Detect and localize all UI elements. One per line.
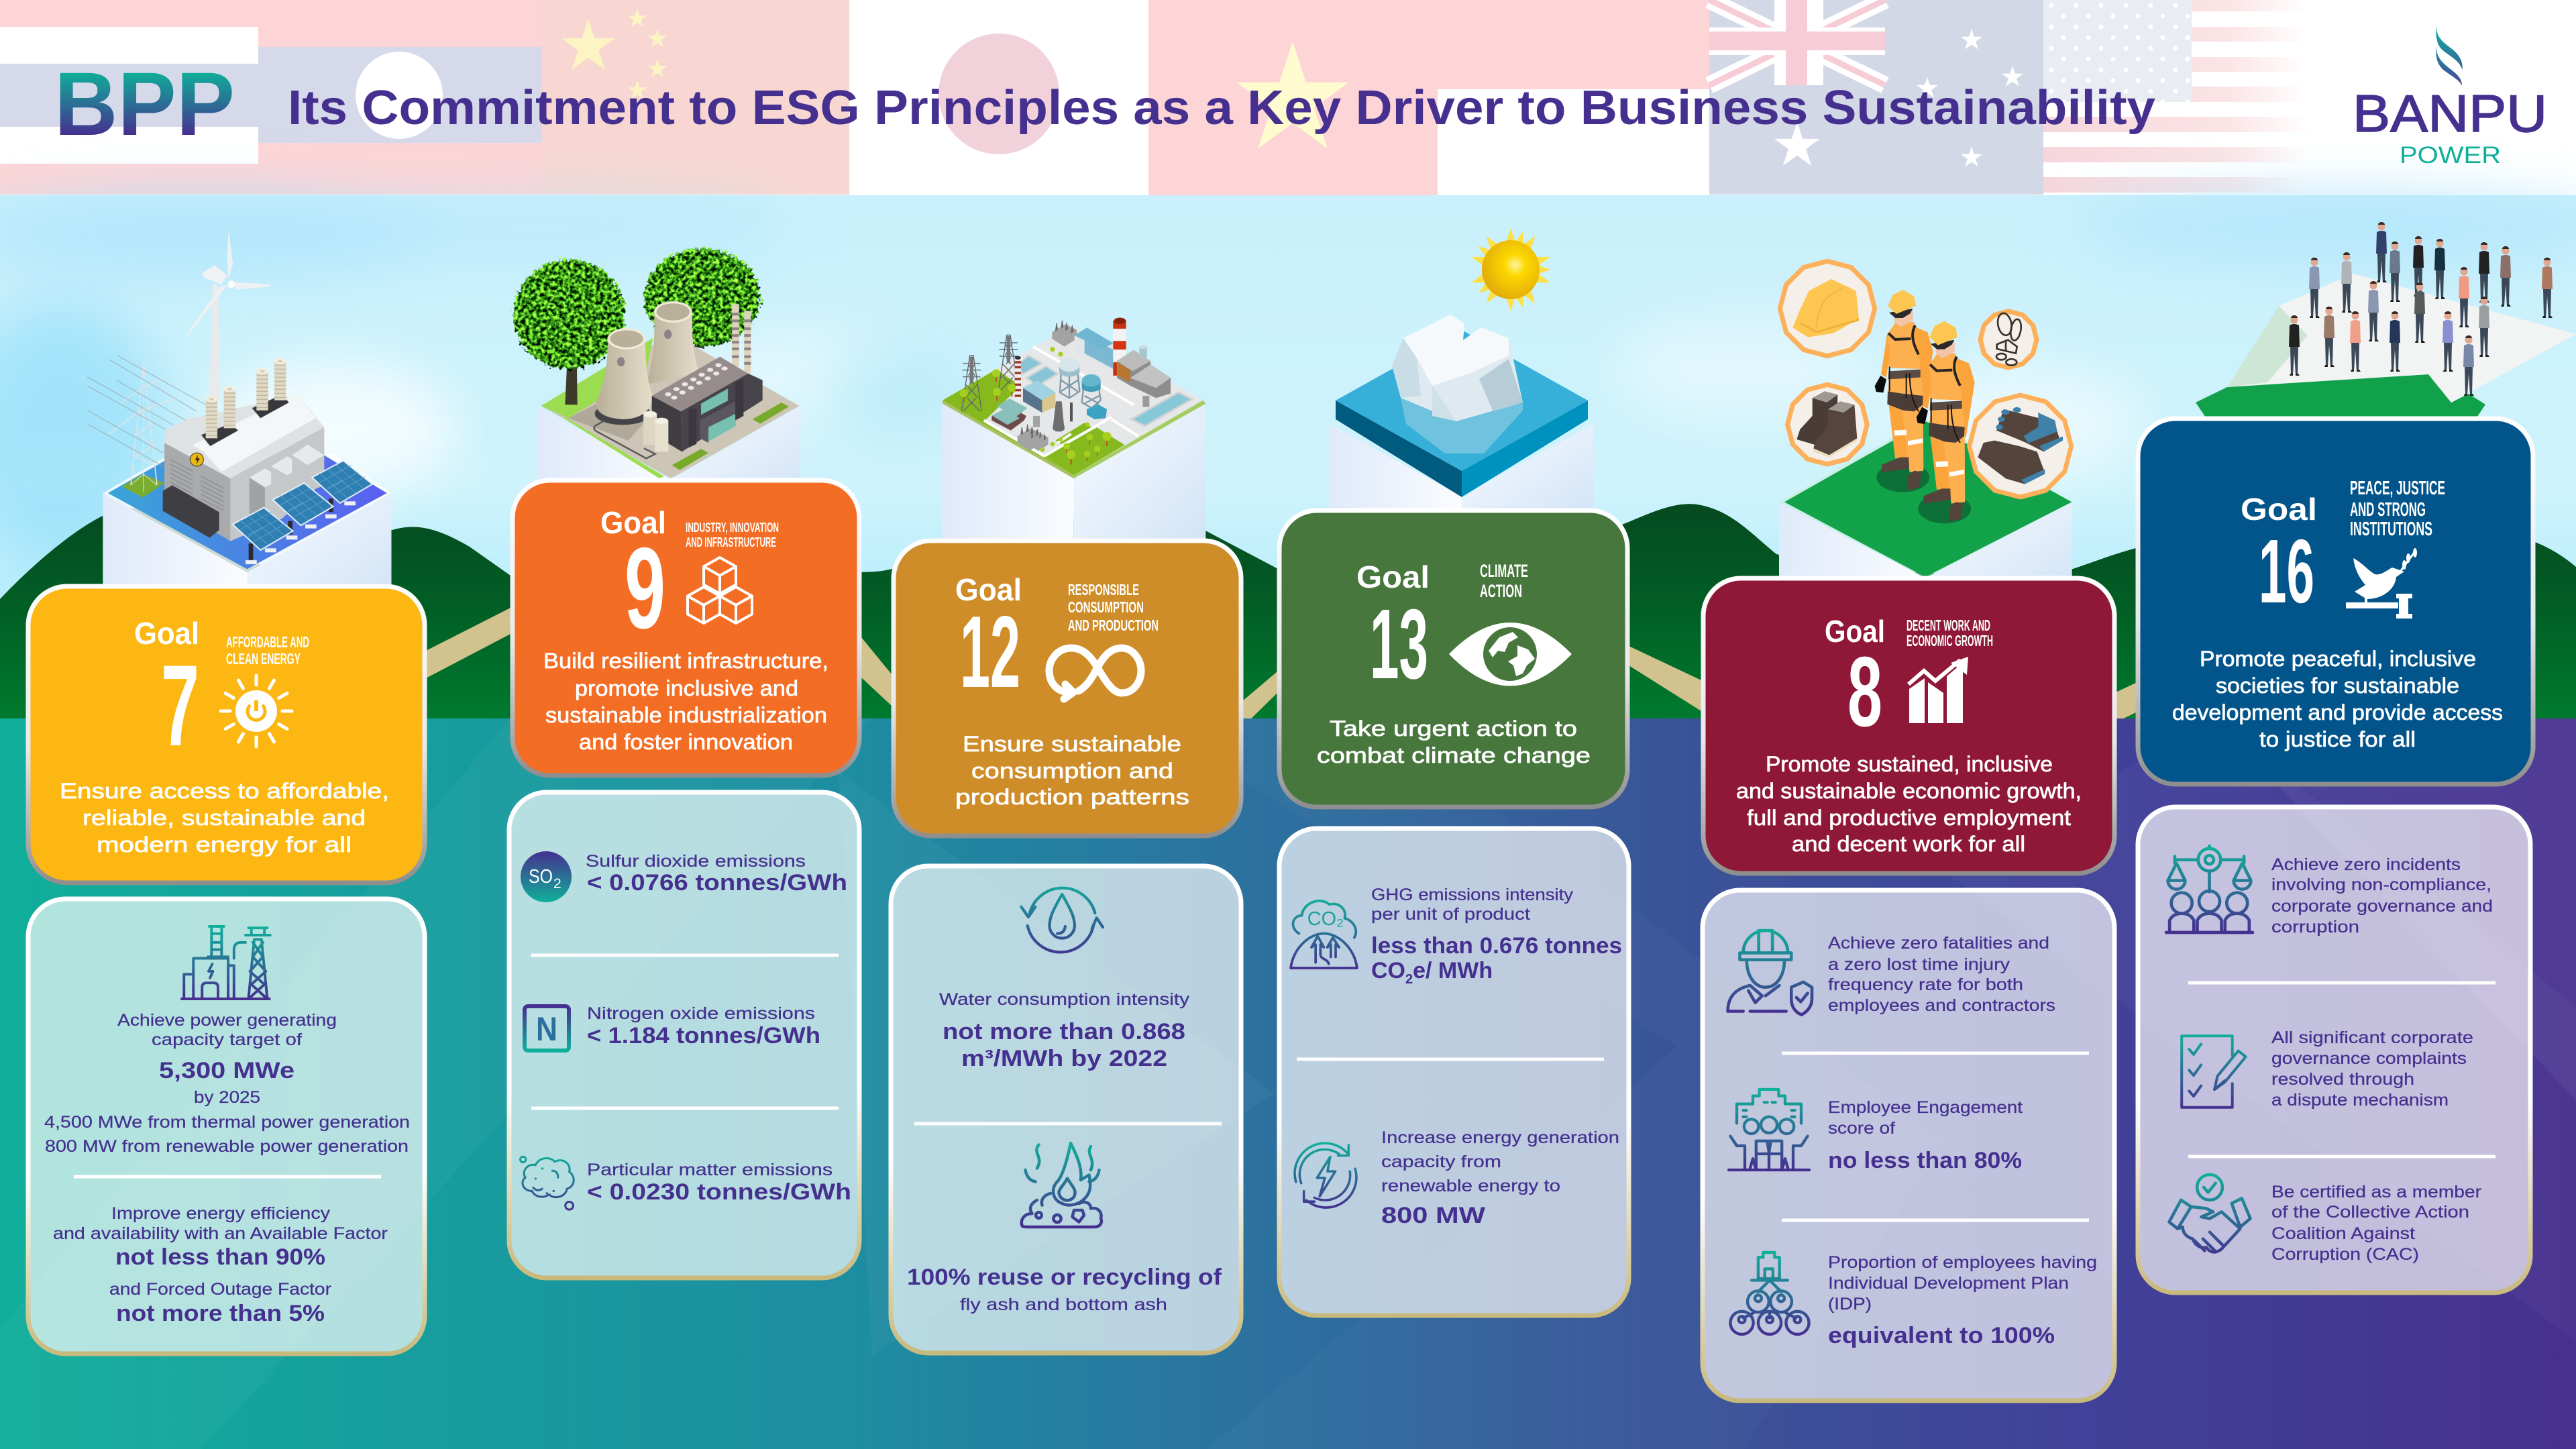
card: goal 9 <box>513 480 859 775</box>
goal label: Goal <box>1825 614 1885 649</box>
engagement target: no less than 80% <box>1828 1148 2022 1173</box>
icon: handshake <box>2169 1175 2250 1252</box>
capacity target text: capacity target of <box>152 1030 302 1049</box>
flag: Laos <box>258 0 542 195</box>
GHG target: GHG emissions intensity <box>1371 885 1574 904</box>
compliance target: corporate governance and <box>2271 897 2493 916</box>
flag: Vietnam <box>1148 0 1438 198</box>
sdg name <box>1480 561 1528 601</box>
icon: employee engagement <box>1729 1089 1809 1170</box>
logo: Banpu Power <box>2353 25 2547 168</box>
goal description: combat climate change <box>1317 743 1591 767</box>
renewable target: Increase energy generation <box>1381 1128 1619 1147</box>
complaints target: a dispute mechanism <box>2271 1091 2449 1110</box>
sdg name: INSTITUTIONS <box>2350 519 2432 540</box>
goal description <box>60 779 389 857</box>
safety target <box>1828 934 2055 1015</box>
flag: Japan <box>849 0 1148 195</box>
CAC target <box>2271 1183 2481 1264</box>
goal description: full and productive employment <box>1747 806 2071 830</box>
ash reuse target: 100% reuse or recycling of <box>907 1265 1222 1290</box>
efficiency target text: Improve energy efficiency <box>111 1204 331 1223</box>
goal description <box>2172 647 2503 751</box>
water target: not more than 0.868 <box>943 1019 1185 1044</box>
goal description: Promote peaceful, inclusive <box>2200 647 2476 671</box>
panel: goal 12 targets <box>891 866 1241 1353</box>
red and white chimney <box>1113 318 1126 376</box>
goal description: Take urgent action to <box>1330 716 1577 741</box>
particular matter target: < 0.0230 tonnes/GWh <box>587 1179 851 1205</box>
tiled office <box>1023 380 1055 413</box>
goal description: Promote sustained, inclusive <box>1766 752 2053 776</box>
flag: China <box>542 0 849 195</box>
renewable target: 800 MW <box>1381 1203 1486 1228</box>
renewable target <box>1381 1128 1619 1228</box>
capacity target text: 800 MW from renewable power generation <box>45 1137 409 1156</box>
nitrogen oxide target: Nitrogen oxide emissions <box>587 1004 815 1023</box>
goal number: 12 <box>960 595 1020 709</box>
goal number: 7 <box>161 641 199 770</box>
icon: power plant and pylon <box>182 926 270 999</box>
icon: nitrogen <box>525 1006 569 1051</box>
goal label: Goal <box>1356 559 1430 594</box>
ash reuse target: fly ash and bottom ash <box>960 1295 1167 1314</box>
efficiency target text: and availability with an Available Factor <box>53 1224 388 1243</box>
goal description: consumption and <box>971 759 1173 783</box>
IDP target: Individual Development Plan <box>1828 1274 2069 1293</box>
icon: nitrogen: N <box>536 1010 557 1048</box>
efficiency target text <box>53 1204 388 1326</box>
GHG target: e/ MWh <box>1413 958 1493 983</box>
goal label: Goal <box>2241 492 2317 527</box>
CAC target: of the Collective Action <box>2271 1203 2469 1222</box>
goal description <box>955 732 1189 809</box>
hills <box>0 504 2576 718</box>
icon: individual development plan <box>1730 1252 1809 1334</box>
workers <box>1875 290 1975 523</box>
compliance target <box>2271 855 2493 936</box>
compliance target: corruption <box>2271 918 2359 936</box>
sdg name <box>686 521 779 550</box>
water target: m³/MWh by 2022 <box>961 1046 1167 1071</box>
efficiency target text: not less than 90% <box>115 1244 325 1270</box>
IDP target: (IDP) <box>1828 1295 1872 1313</box>
flag: USA <box>2043 0 2308 195</box>
goal description <box>1736 752 2082 856</box>
goal description: promote inclusive and <box>575 676 798 700</box>
goal label: Goal <box>600 505 666 540</box>
IDP target: equivalent to 100% <box>1828 1323 2055 1348</box>
engagement target <box>1828 1098 2023 1173</box>
sulfur dioxide target: < 0.0766 tonnes/GWh <box>587 870 847 896</box>
goal description: and foster innovation <box>579 730 793 754</box>
scene: goal 9 cooling towers and trees <box>513 248 800 498</box>
scene: goal 8 workers with safety equipment <box>1779 261 2072 590</box>
water towers <box>1060 374 1101 408</box>
capacity target text <box>44 1011 410 1156</box>
safety target: Achieve zero fatalities and <box>1828 934 2049 953</box>
CAC target: Corruption (CAC) <box>2271 1245 2419 1264</box>
icon: SO2: SO <box>529 866 553 888</box>
icon: CO2 cloud <box>1291 901 1357 968</box>
solar panels <box>233 461 372 564</box>
trees <box>513 248 760 405</box>
goal description: reliable, sustainable and <box>83 806 366 830</box>
logo: BPP: BPP <box>54 54 235 154</box>
icon: infinity loop <box>1049 648 1141 699</box>
icon: renewable energy <box>1295 1143 1356 1208</box>
IDP target <box>1828 1253 2097 1348</box>
scene: goal 12 industrial complex <box>942 318 1205 543</box>
card: goal 13 <box>1279 511 1627 807</box>
pylons <box>961 335 1018 411</box>
icon: checklist and pencil <box>2182 1036 2246 1108</box>
icon: SO2 <box>521 851 572 902</box>
harness badge <box>1980 311 2037 368</box>
safety target: employees and contractors <box>1828 996 2055 1015</box>
wind turbine <box>188 229 270 400</box>
sdg name: AND INFRASTRUCTURE <box>686 535 776 550</box>
icon: cubes <box>688 557 752 623</box>
icon: eye with globe <box>1449 623 1572 686</box>
sun <box>1459 213 1567 320</box>
card: goal 8 <box>1703 578 2114 873</box>
efficiency target text: and Forced Outage Factor <box>109 1280 331 1299</box>
boots badge <box>1788 384 1867 464</box>
engagement target: score of <box>1828 1119 1895 1138</box>
goal description: Build resilient infrastructure, <box>543 649 828 673</box>
chimneys and plant building <box>643 304 763 451</box>
goal number: 9 <box>625 524 665 653</box>
sdg name <box>226 633 309 667</box>
CAC target: Be certified as a member <box>2271 1183 2481 1201</box>
particular matter target: Particular matter emissions <box>587 1161 833 1179</box>
sdg name: ACTION <box>1480 581 1522 601</box>
panel: goal 8 targets <box>1703 890 2114 1401</box>
sulfur dioxide target <box>586 852 847 896</box>
blue main building <box>1075 327 1114 369</box>
icon: dove and gavel <box>2346 548 2417 619</box>
logo: Banpu Power: POWER <box>2400 142 2501 168</box>
card: goal 7 <box>28 586 425 883</box>
icon: SO2: 2 <box>553 876 561 892</box>
flag: Thailand <box>0 0 258 195</box>
complaints target <box>2271 1028 2473 1110</box>
sdg name: CLEAN ENERGY <box>226 650 301 667</box>
GHG target: CO <box>1371 958 1405 983</box>
sdg name: AND PRODUCTION <box>1068 616 1159 634</box>
icon: growth chart <box>1909 657 1968 723</box>
goal description: societies for sustainable <box>2216 674 2459 698</box>
ash reuse target <box>907 1265 1222 1314</box>
goal label: Goal <box>955 572 1022 607</box>
sdg name <box>2350 478 2445 540</box>
renewable target: renewable energy to <box>1381 1177 1560 1195</box>
card: goal 16 <box>2138 419 2533 784</box>
pools <box>1018 356 1192 426</box>
icon: governance scales <box>2166 846 2253 932</box>
sdg name: CLIMATE <box>1480 561 1528 581</box>
complaints target: governance complaints <box>2271 1049 2467 1068</box>
sdg name: AFFORDABLE AND <box>226 633 309 651</box>
complaints target: resolved through <box>2271 1070 2414 1089</box>
sdg name: CONSUMPTION <box>1068 598 1144 616</box>
icon: safety worker <box>1728 930 1812 1015</box>
goal description <box>543 649 828 754</box>
sulfur dioxide target: Sulfur dioxide emissions <box>586 852 806 871</box>
goal description: and sustainable economic growth, <box>1736 779 2082 803</box>
goal description: production patterns <box>955 785 1189 809</box>
flag: Australia <box>1709 0 2043 195</box>
panel: goal 9 emission targets <box>509 792 859 1278</box>
goal description <box>1317 716 1591 767</box>
roads <box>426 608 2140 728</box>
capacity target text: 5,300 MWe <box>159 1058 294 1083</box>
sdg name: RESPONSIBLE <box>1068 581 1139 598</box>
renewable target: capacity from <box>1381 1152 1501 1171</box>
water target <box>939 990 1190 1071</box>
sdg name: AND STRONG <box>2350 499 2426 521</box>
capacity target text: 4,500 MWe from thermal power generation <box>44 1113 410 1132</box>
goal description: Ensure access to affordable, <box>60 779 389 803</box>
goal label: Goal <box>134 616 199 651</box>
sdg name: DECENT WORK AND <box>1907 616 1990 634</box>
goal description: modern energy for all <box>97 833 352 857</box>
GHG target <box>1371 885 1622 987</box>
helmet badge <box>1780 261 1875 356</box>
scene: goal 16 people on a green plaza <box>2196 222 2576 429</box>
goal description: development and provide access <box>2172 700 2503 724</box>
sdg name: PEACE, JUSTICE <box>2350 478 2445 499</box>
icon: particulate cloud <box>521 1157 574 1210</box>
cooling towers <box>594 301 700 458</box>
grey buildings <box>1117 345 1171 407</box>
nitrogen oxide target: < 1.184 tonnes/GWh <box>587 1023 820 1049</box>
green roof hall <box>991 398 1028 431</box>
sdg name: INDUSTRY, INNOVATION <box>686 521 779 535</box>
GHG target: less than 0.676 tonnes <box>1371 933 1622 959</box>
scene: goal 13 iceberg and sun <box>1330 213 1593 517</box>
GHG target: per unit of product <box>1371 905 1530 924</box>
compliance target: Achieve zero incidents <box>2271 855 2461 874</box>
icon: burning ash <box>1022 1143 1102 1227</box>
goal number: 8 <box>1847 637 1882 747</box>
logo: Banpu Power: BANPU <box>2353 84 2547 143</box>
factory <box>163 358 324 541</box>
engagement target: Employee Engagement <box>1828 1098 2023 1117</box>
icon: energy sun <box>221 676 292 747</box>
panel: goal 13 targets <box>1279 828 1629 1316</box>
sdg name <box>1907 616 1993 649</box>
IDP target: Proportion of employees having <box>1828 1253 2097 1272</box>
people crowd <box>2289 222 2553 396</box>
goal number: 13 <box>1370 589 1428 700</box>
safety target: a zero lost time injury <box>1828 955 2010 974</box>
GHG target: 2 <box>1405 972 1413 987</box>
goal description: and decent work for all <box>1792 832 2025 856</box>
header: flag banner <box>0 0 2576 198</box>
goal description: sustainable industrialization <box>545 703 827 727</box>
goal description: to justice for all <box>2259 727 2416 751</box>
flag: Indonesia <box>1438 0 1709 195</box>
icon: water cycle <box>1021 888 1103 952</box>
scene: goal 7 power plant with turbine and solar panels <box>87 229 391 602</box>
tower and machinery <box>1033 401 1107 431</box>
CAC target: Coalition Against <box>2271 1224 2415 1243</box>
substations <box>1018 321 1077 451</box>
goal description: Ensure sustainable <box>963 732 1181 756</box>
sdg name: ECONOMIC GROWTH <box>1907 632 1993 649</box>
iceberg <box>1392 315 1523 453</box>
card: goal 12 <box>894 541 1241 836</box>
sdg name <box>1068 581 1159 634</box>
header text and logos <box>54 25 2547 168</box>
icon: CO2 cloud: CO₂ <box>1307 908 1344 930</box>
compliance target: involving non-compliance, <box>2271 875 2491 894</box>
trees <box>960 347 1112 464</box>
particular matter target <box>587 1161 851 1205</box>
panel: goal 7 targets <box>28 899 425 1354</box>
nitrogen oxide target <box>587 1004 820 1049</box>
panel: goal 16 targets <box>2138 807 2530 1293</box>
goal number: 16 <box>2259 521 2314 622</box>
safety target: frequency rate for both <box>1828 975 2023 994</box>
complaints target: All significant corporate <box>2271 1028 2473 1047</box>
striped chimney <box>1015 356 1021 401</box>
transmission pylon <box>109 362 176 492</box>
water target: Water consumption intensity <box>939 990 1190 1009</box>
capacity target text: by 2025 <box>194 1088 260 1107</box>
capacity target text: Achieve power generating <box>117 1011 337 1030</box>
title: Its Commitment to ESG Principles as a Key Driver to Business Sustainability <box>288 81 2155 135</box>
gloves badge <box>1970 395 2072 497</box>
efficiency target text: not more than 5% <box>116 1301 325 1326</box>
